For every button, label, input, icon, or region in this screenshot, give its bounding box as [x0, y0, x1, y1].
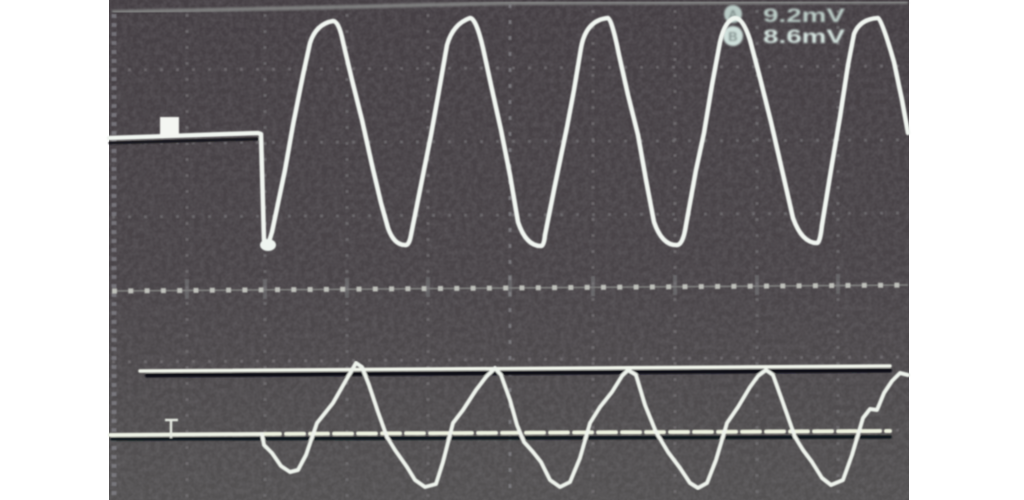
lower trace group [110, 363, 908, 488]
upper waveform line [109, 18, 908, 246]
peak cursor shadow [147, 370, 890, 376]
trigger marker T [165, 420, 178, 438]
centre axis major ticks [187, 274, 838, 299]
stimulus pulse [160, 117, 179, 137]
peak level cursor line [140, 366, 890, 371]
channel B marker: B [728, 29, 738, 44]
upper trace: evoked oscillation waveform [109, 18, 908, 251]
readout: voltage values [723, 5, 845, 48]
top bezel edge [112, 2, 908, 12]
channel A value: 9.2mV [763, 6, 845, 27]
centre vertical axis [508, 4, 512, 500]
screen background [109, 0, 909, 500]
trough blob [260, 239, 276, 251]
graticule [112, 4, 908, 500]
lower waveform line [262, 363, 908, 488]
left edge scale [112, 14, 116, 500]
channel B value: 8.6mV [763, 27, 845, 48]
minor vertical grid dots [187, 10, 838, 500]
channel A marker: A [728, 7, 738, 22]
baseline shadow [110, 139, 258, 143]
minor horizontal grid dots [112, 66, 908, 436]
centre horizontal axis [112, 285, 908, 291]
baseline shadow [112, 437, 890, 439]
dashed baseline segment [262, 431, 890, 434]
solid baseline segment [110, 434, 262, 435]
